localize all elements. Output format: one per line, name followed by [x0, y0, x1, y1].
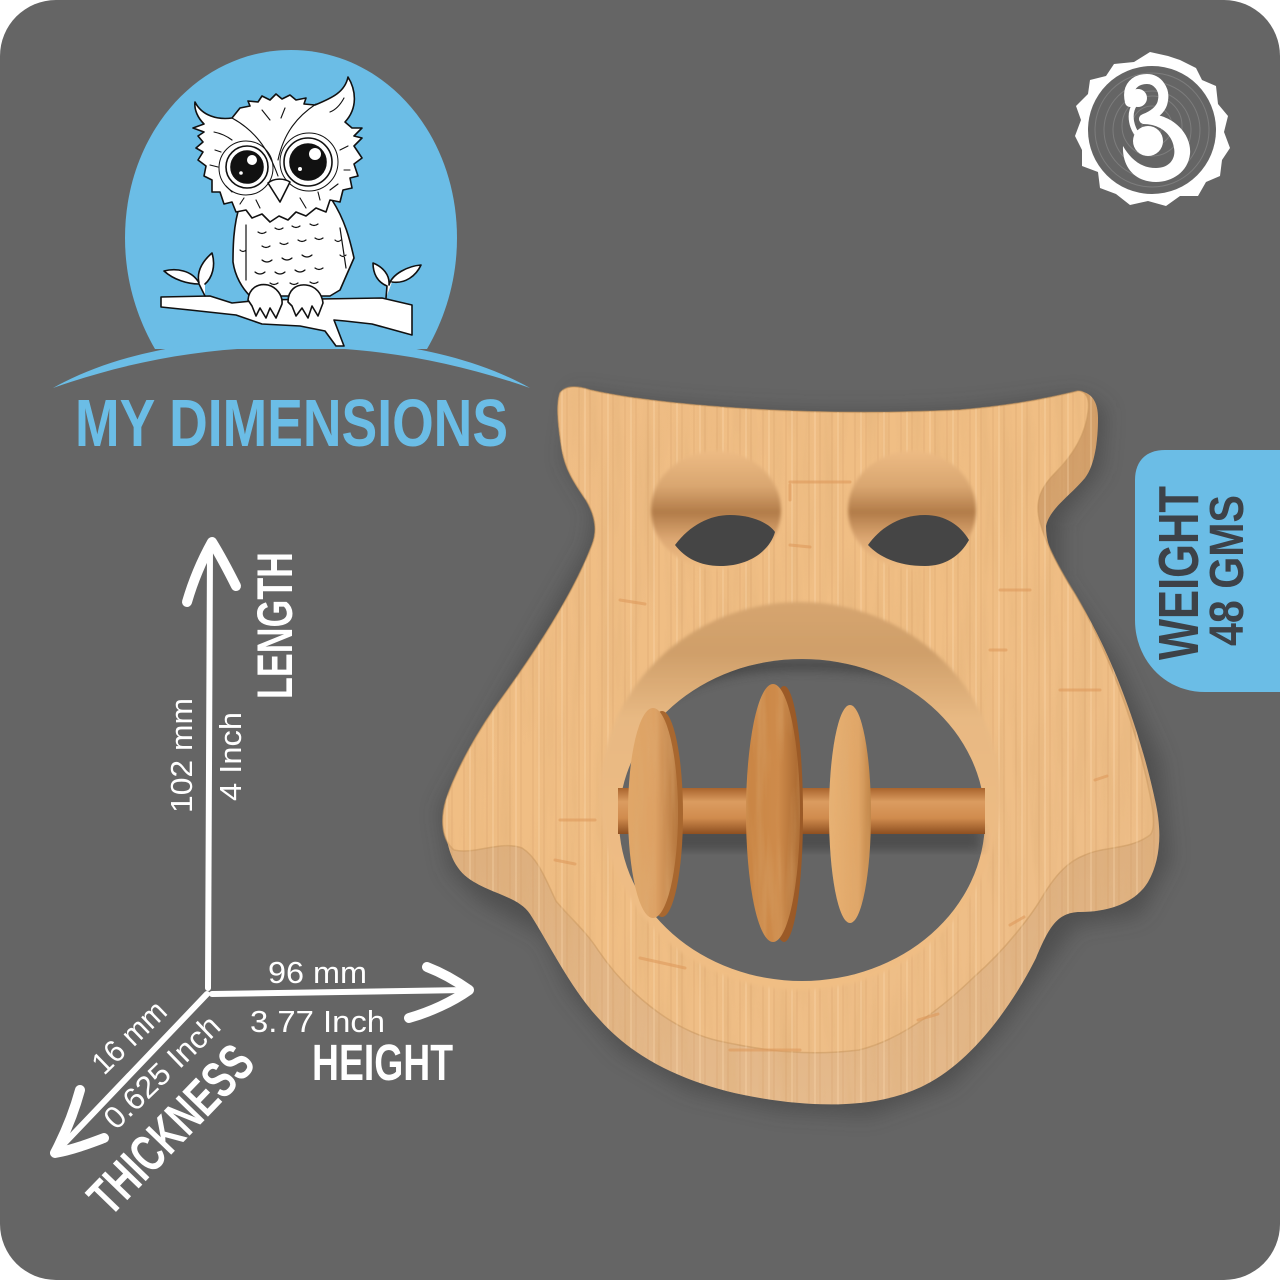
- dowel: [618, 788, 985, 834]
- logo: my dimensions emblem: [53, 50, 530, 461]
- dimension arrows: [55, 542, 469, 1153]
- product: wooden owl rattle: [440, 387, 1170, 1115]
- owl left foot: [248, 285, 282, 318]
- growth rings: [1095, 73, 1209, 187]
- orange wood flecks: [555, 480, 1107, 1050]
- weight label: WEIGHT: [1147, 486, 1211, 660]
- right leaves: [373, 263, 421, 298]
- thickness arrow: [55, 994, 207, 1153]
- middle disk: [746, 684, 803, 942]
- left disk: [628, 708, 683, 918]
- owl right foot: [288, 285, 323, 318]
- THICKNESS: THICKNESS: [77, 1034, 266, 1226]
- brand logo: wood slice with 3: [1075, 52, 1230, 206]
- owl left eye: [219, 141, 273, 195]
- numeral 3 swirl: [1123, 79, 1190, 182]
- left eye hole: [675, 515, 775, 566]
- wood grain: [445, 387, 1159, 1104]
- wood mottling: [445, 387, 1159, 1104]
- owl right eye: [280, 133, 338, 191]
- blue moon dome: [125, 50, 457, 349]
- length arrow: [187, 542, 236, 988]
- centre through hole: [619, 659, 985, 981]
- owl body: [233, 200, 354, 296]
- outer side band: [445, 387, 1159, 1104]
- 3.77 Inch: 3.77 Inch: [250, 1004, 385, 1039]
- left eye recess: [651, 451, 781, 569]
- centre ring inner wall: [600, 602, 1000, 990]
- 4 Inch: 4 Inch: [213, 712, 248, 801]
- left leaves: [164, 253, 214, 296]
- owl head feather lines: [210, 98, 350, 208]
- illustration: owl on a branch: [161, 77, 421, 346]
- owl beak: [268, 179, 290, 202]
- weight tab: [1135, 450, 1280, 692]
- tab shape: [1135, 450, 1280, 692]
- 16 mm: 16 mm: [85, 993, 174, 1081]
- LENGTH: LENGTH: [247, 552, 303, 699]
- branch: [161, 296, 412, 346]
- HEIGHT: HEIGHT: [312, 1034, 453, 1091]
- jagged slice: [1075, 52, 1230, 206]
- 102 mm: 102 mm: [164, 698, 199, 813]
- right disk: [829, 705, 871, 923]
- slice inner circle: [1088, 66, 1216, 194]
- owl feather scales: [240, 224, 346, 284]
- 96 mm: 96 mm: [268, 955, 367, 990]
- hole inner shadow: [690, 659, 890, 692]
- height arrow: [212, 967, 469, 1018]
- arc under the dome: [53, 338, 530, 388]
- dowel shadow: [640, 828, 980, 850]
- logo title: MY DIMENSIONS: [75, 386, 508, 461]
- drop shadow: [440, 392, 1170, 1115]
- 0.625 Inch: 0.625 Inch: [97, 1008, 227, 1136]
- length text: [77, 552, 453, 1226]
- right eye recess: [848, 451, 976, 569]
- weight value: 48 GMS: [1201, 495, 1254, 646]
- owl head: [193, 77, 362, 222]
- main face: [443, 387, 1153, 1053]
- right eye hole: [868, 515, 969, 566]
